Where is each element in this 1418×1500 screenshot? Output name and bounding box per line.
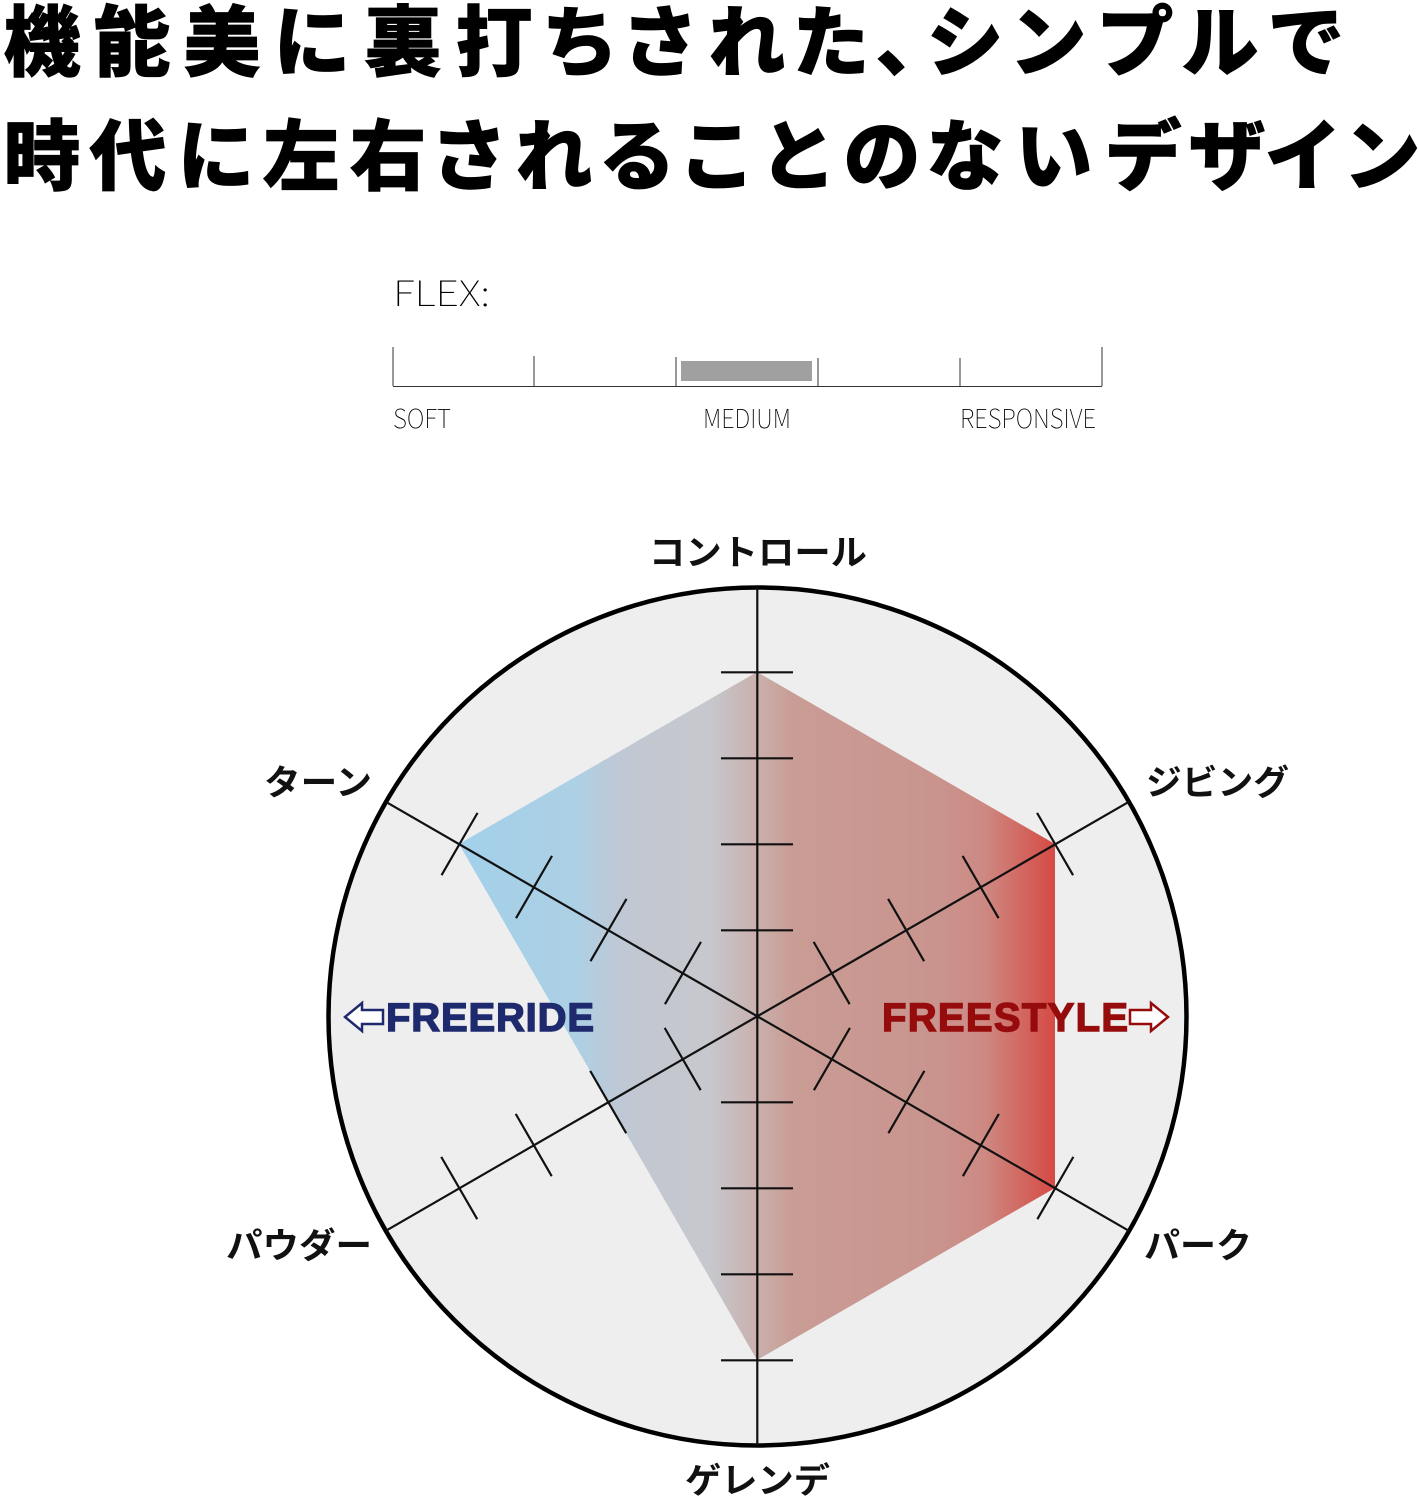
flex scale xyxy=(393,266,1102,436)
flex scale ruler xyxy=(393,347,1102,386)
axis labels: コントロール xyxy=(649,534,867,573)
icon: right arrow xyxy=(1130,1003,1168,1031)
axis labels: ターン xyxy=(264,764,372,803)
axis labels: パウダー xyxy=(226,1226,372,1266)
axis labels: ゲレンデ xyxy=(685,1461,830,1500)
axis labels xyxy=(226,534,1289,1500)
radar data polygon xyxy=(459,672,1055,1360)
title: 時代に左右されることのないデザイン xyxy=(4,96,1418,207)
flex heading: FLEX: xyxy=(393,266,490,317)
icon: left arrow xyxy=(345,1003,383,1031)
chart circle xyxy=(328,588,1186,1446)
flex labels: SOFT xyxy=(393,399,451,436)
flex medium marker xyxy=(681,361,812,381)
title xyxy=(4,0,1418,207)
flex labels: MEDIUM xyxy=(703,399,791,436)
flex labels: RESPONSIVE xyxy=(960,399,1096,436)
axis labels: パーク xyxy=(1144,1227,1252,1266)
axes with ticks xyxy=(368,587,1147,1445)
radar chart xyxy=(226,534,1289,1500)
freeride label: FREERIDE xyxy=(386,996,594,1040)
axis labels: ジビング xyxy=(1146,764,1289,803)
freestyle label: FREESTYLE xyxy=(882,996,1128,1040)
flex labels xyxy=(393,399,1096,436)
